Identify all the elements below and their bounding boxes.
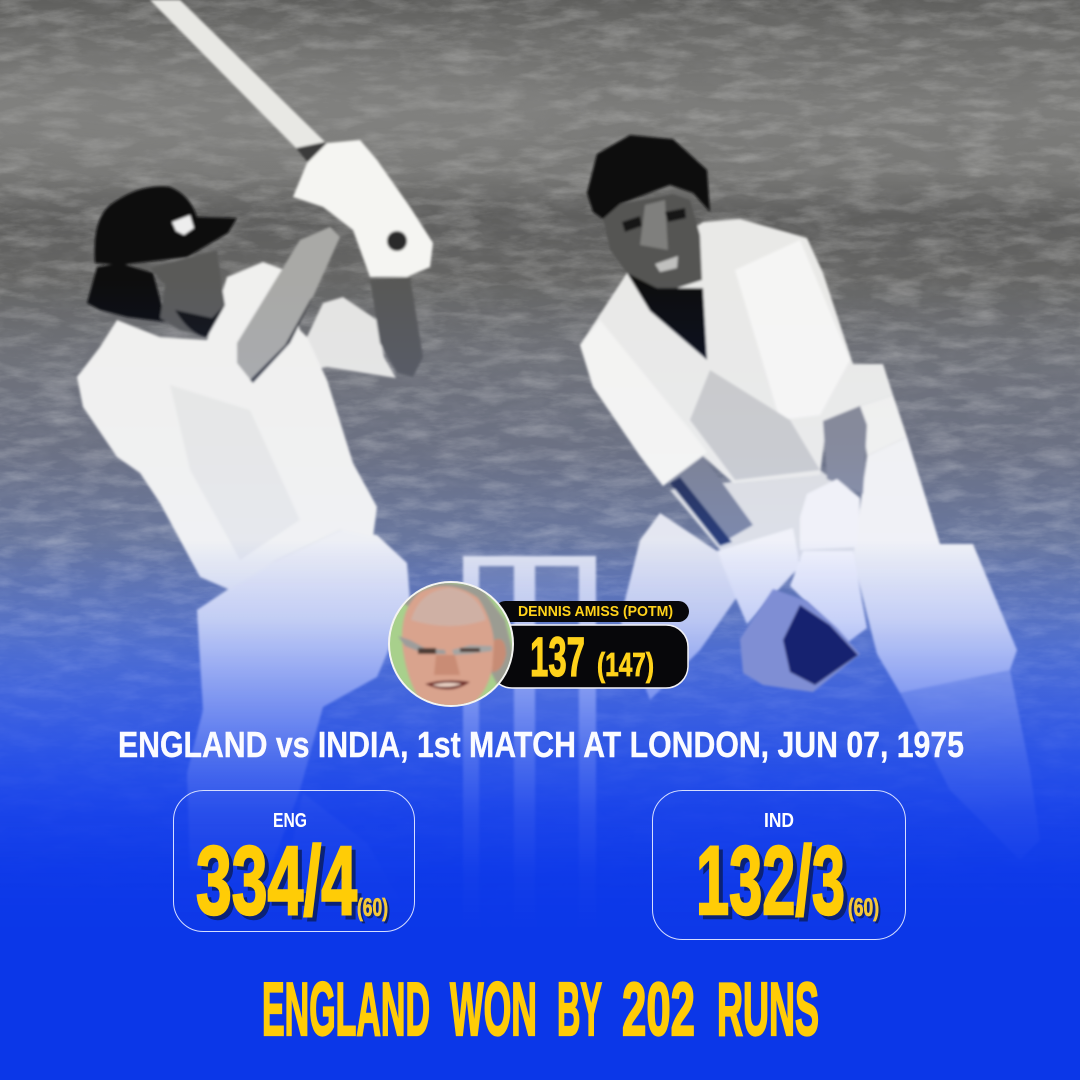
- rear sleeve: [300, 297, 396, 378]
- right batsman: [580, 135, 1040, 860]
- score pill: (147): [597, 646, 654, 683]
- England runs: 334/4: [196, 826, 357, 935]
- cap: [95, 186, 237, 265]
- England runs: 334/4: [200, 830, 361, 939]
- shirt: [580, 219, 893, 486]
- score pill: [490, 625, 688, 688]
- hair: [587, 135, 710, 219]
- panel: India score: IND: [764, 810, 794, 832]
- bat handle: [387, 231, 407, 251]
- pad and thigh: [853, 437, 1017, 693]
- left batsman: [77, 0, 433, 900]
- front forearm: [237, 227, 340, 383]
- India runs: (60): [848, 894, 879, 922]
- chest and neck: [627, 273, 707, 360]
- shirt highlights and shadow: [735, 240, 850, 420]
- cap badge: [172, 215, 194, 235]
- result headline: 202: [622, 967, 695, 1051]
- gloves: [293, 140, 433, 277]
- shirt shadow: [170, 385, 300, 560]
- blue gradient overlay: [0, 540, 1080, 1080]
- lighter patch of the outfield: [0, 50, 580, 170]
- portrait: Dennis Amiss: [388, 581, 515, 708]
- score pill: 137: [530, 625, 585, 688]
- back leg trousers: [620, 513, 737, 700]
- panel: England score: ENG: [273, 810, 307, 832]
- panel: India score: [652, 790, 906, 940]
- stumps: [463, 556, 596, 1000]
- India runs: 132/3: [696, 826, 845, 935]
- gloves: [717, 528, 800, 624]
- India runs: (60): [850, 896, 881, 924]
- name pill: [495, 601, 689, 622]
- result headline: ENGLAND: [262, 967, 430, 1051]
- second leg: [280, 793, 400, 900]
- bat: [150, 0, 325, 150]
- England runs: (60): [357, 894, 388, 922]
- England runs: (60): [359, 896, 390, 924]
- rear forearm: [370, 277, 423, 377]
- name pill: DENNIS AMISS (POTM): [518, 603, 673, 620]
- result headline: WON: [450, 967, 537, 1051]
- right sleeve: [860, 395, 907, 456]
- India runs: 132/3: [700, 830, 849, 939]
- hip: [670, 470, 860, 560]
- lower pad: [900, 670, 1040, 860]
- forearms: [670, 456, 753, 544]
- player of the match badge: [388, 581, 689, 708]
- left sleeve: [580, 320, 707, 486]
- wicket keeping glove palm: [740, 589, 860, 692]
- text: RUNS: [717, 967, 819, 1051]
- result headline: [262, 967, 819, 1051]
- face: [603, 194, 702, 288]
- blue tint over the photo: [0, 280, 1080, 1080]
- result headline: BY: [557, 967, 602, 1051]
- shirt: [77, 262, 377, 590]
- face: [150, 250, 225, 337]
- hair: [87, 263, 175, 323]
- trousers: [187, 530, 410, 870]
- panel: England score: [174, 790, 414, 939]
